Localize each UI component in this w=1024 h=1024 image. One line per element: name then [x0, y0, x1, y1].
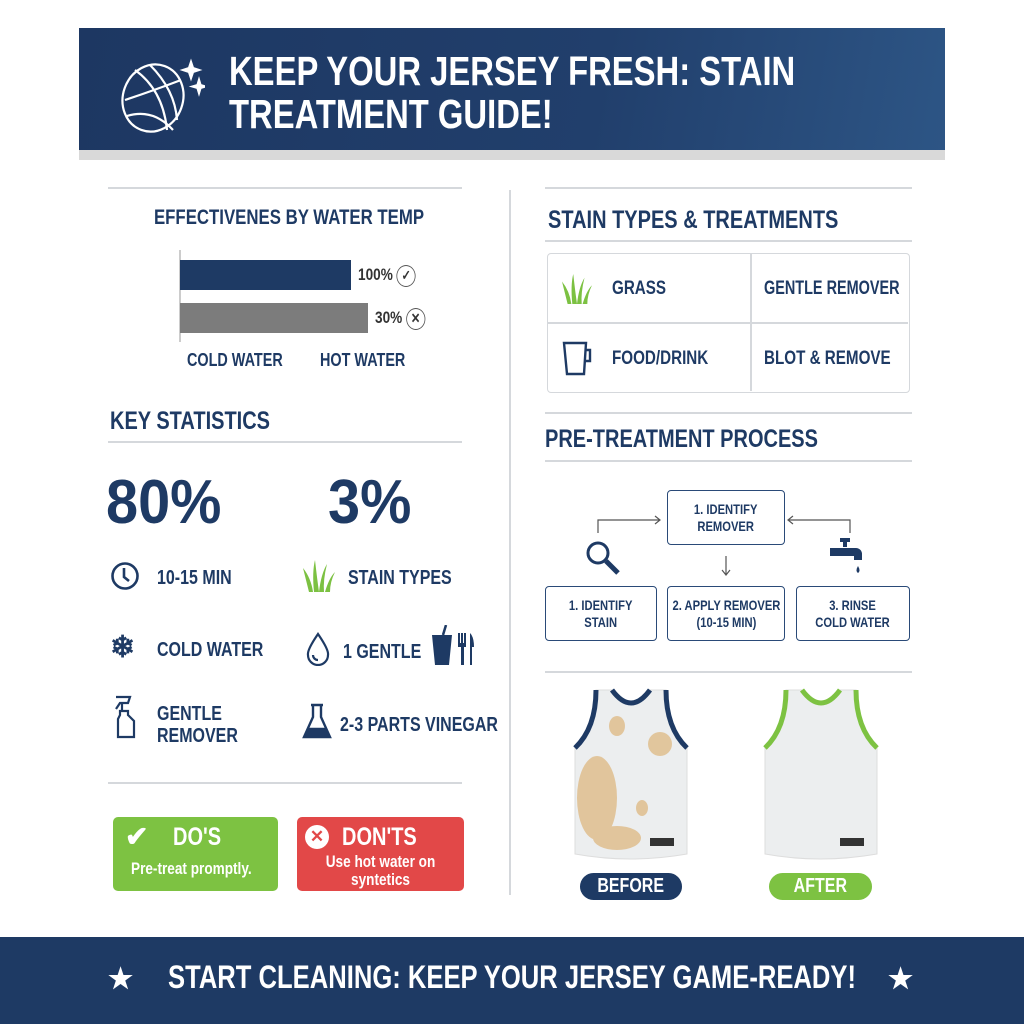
footer banner: START CLEANING: KEEP YOUR JERSEY GAME-READY! — [168, 959, 856, 995]
title: TREATMENT GUIDE! — [229, 91, 553, 137]
don'ts box: DON'TS — [342, 823, 417, 851]
icon: clock — [111, 562, 139, 590]
bar chart: COLD WATER — [187, 350, 283, 370]
bar chart: ✓ — [401, 267, 411, 283]
do's box — [113, 817, 278, 891]
jersey after — [763, 688, 879, 860]
process flow: COLD WATER — [816, 614, 890, 630]
process flow: 2. APPLY REMOVER — [672, 597, 780, 613]
icon: basketball — [121, 58, 205, 133]
don'ts box: syntetics — [351, 870, 410, 889]
process flow: STAIN — [585, 614, 617, 630]
icon: snowflake: ❄ — [110, 631, 135, 664]
stat items: STAIN TYPES — [348, 567, 452, 589]
process flow: (10-15 MIN) — [696, 614, 756, 630]
stat items: 10-15 MIN — [157, 567, 232, 589]
step box top: REMOVER — [698, 518, 754, 534]
footer banner — [0, 937, 1024, 1024]
icon: grass — [303, 560, 335, 592]
heading: key statistics: KEY STATISTICS — [110, 407, 270, 435]
stat items: GENTLE — [157, 703, 222, 725]
icon: spray bottle — [115, 696, 136, 738]
bar chart: 100% — [358, 265, 393, 284]
stat items: REMOVER — [157, 725, 238, 747]
stat 80%: 80% — [106, 468, 221, 537]
heading: pre-treatment: PRE-TREATMENT PROCESS — [545, 425, 818, 453]
label before: BEFORE — [598, 875, 664, 897]
label after — [769, 873, 872, 900]
header banner — [79, 28, 945, 160]
icon: magnifier — [586, 542, 620, 575]
don'ts box — [297, 817, 464, 891]
stat items: COLD WATER — [157, 639, 263, 661]
do's box: DO'S — [173, 823, 221, 851]
don'ts box: Use hot water on — [326, 852, 435, 871]
label before — [580, 873, 682, 900]
stain table: FOOD/DRINK — [612, 348, 708, 369]
bar chart: 30% — [375, 308, 402, 327]
stain table: GRASS — [612, 278, 666, 299]
stain table — [547, 253, 910, 393]
stat 3%: 3% — [328, 468, 411, 537]
footer banner: ★ — [108, 963, 133, 994]
icon: grass — [562, 274, 592, 304]
jersey before — [573, 688, 689, 860]
do's box: Pre-treat promptly. — [131, 859, 252, 878]
icon: drop — [306, 632, 330, 666]
arrows — [597, 516, 851, 576]
step box top: 1. IDENTIFY — [694, 501, 758, 517]
icon: faucet — [830, 538, 862, 573]
stat items: 2-3 PARTS VINEGAR — [340, 714, 498, 736]
icon: mug — [562, 342, 592, 376]
stat items: 1 GENTLE — [343, 641, 421, 663]
icon: flask — [302, 704, 332, 738]
footer banner: ★ — [888, 963, 913, 994]
step box top — [667, 490, 785, 545]
title — [229, 48, 795, 137]
bar chart: ✕ — [411, 310, 420, 326]
heading: stain types: STAIN TYPES & TREATMENTS — [548, 206, 838, 234]
process flow: 3. RINSE — [830, 597, 876, 613]
stain table: GENTLE REMOVER — [764, 278, 900, 299]
do's box: ✔ — [125, 821, 148, 852]
label after: AFTER — [794, 875, 847, 897]
bar chart: HOT WATER — [320, 350, 405, 370]
icon: cup and fork — [432, 625, 474, 665]
process flow: 1. IDENTIFY — [569, 597, 633, 613]
heading: effectiveness: EFFECTIVENES BY WATER TEMP — [154, 206, 424, 229]
title: KEEP YOUR JERSEY FRESH: STAIN — [229, 48, 795, 94]
don'ts box: ✕ — [310, 827, 324, 846]
bar chart — [179, 250, 426, 370]
stain table: BLOT & REMOVE — [764, 348, 891, 369]
process flow — [545, 490, 910, 641]
stat items — [110, 560, 498, 747]
